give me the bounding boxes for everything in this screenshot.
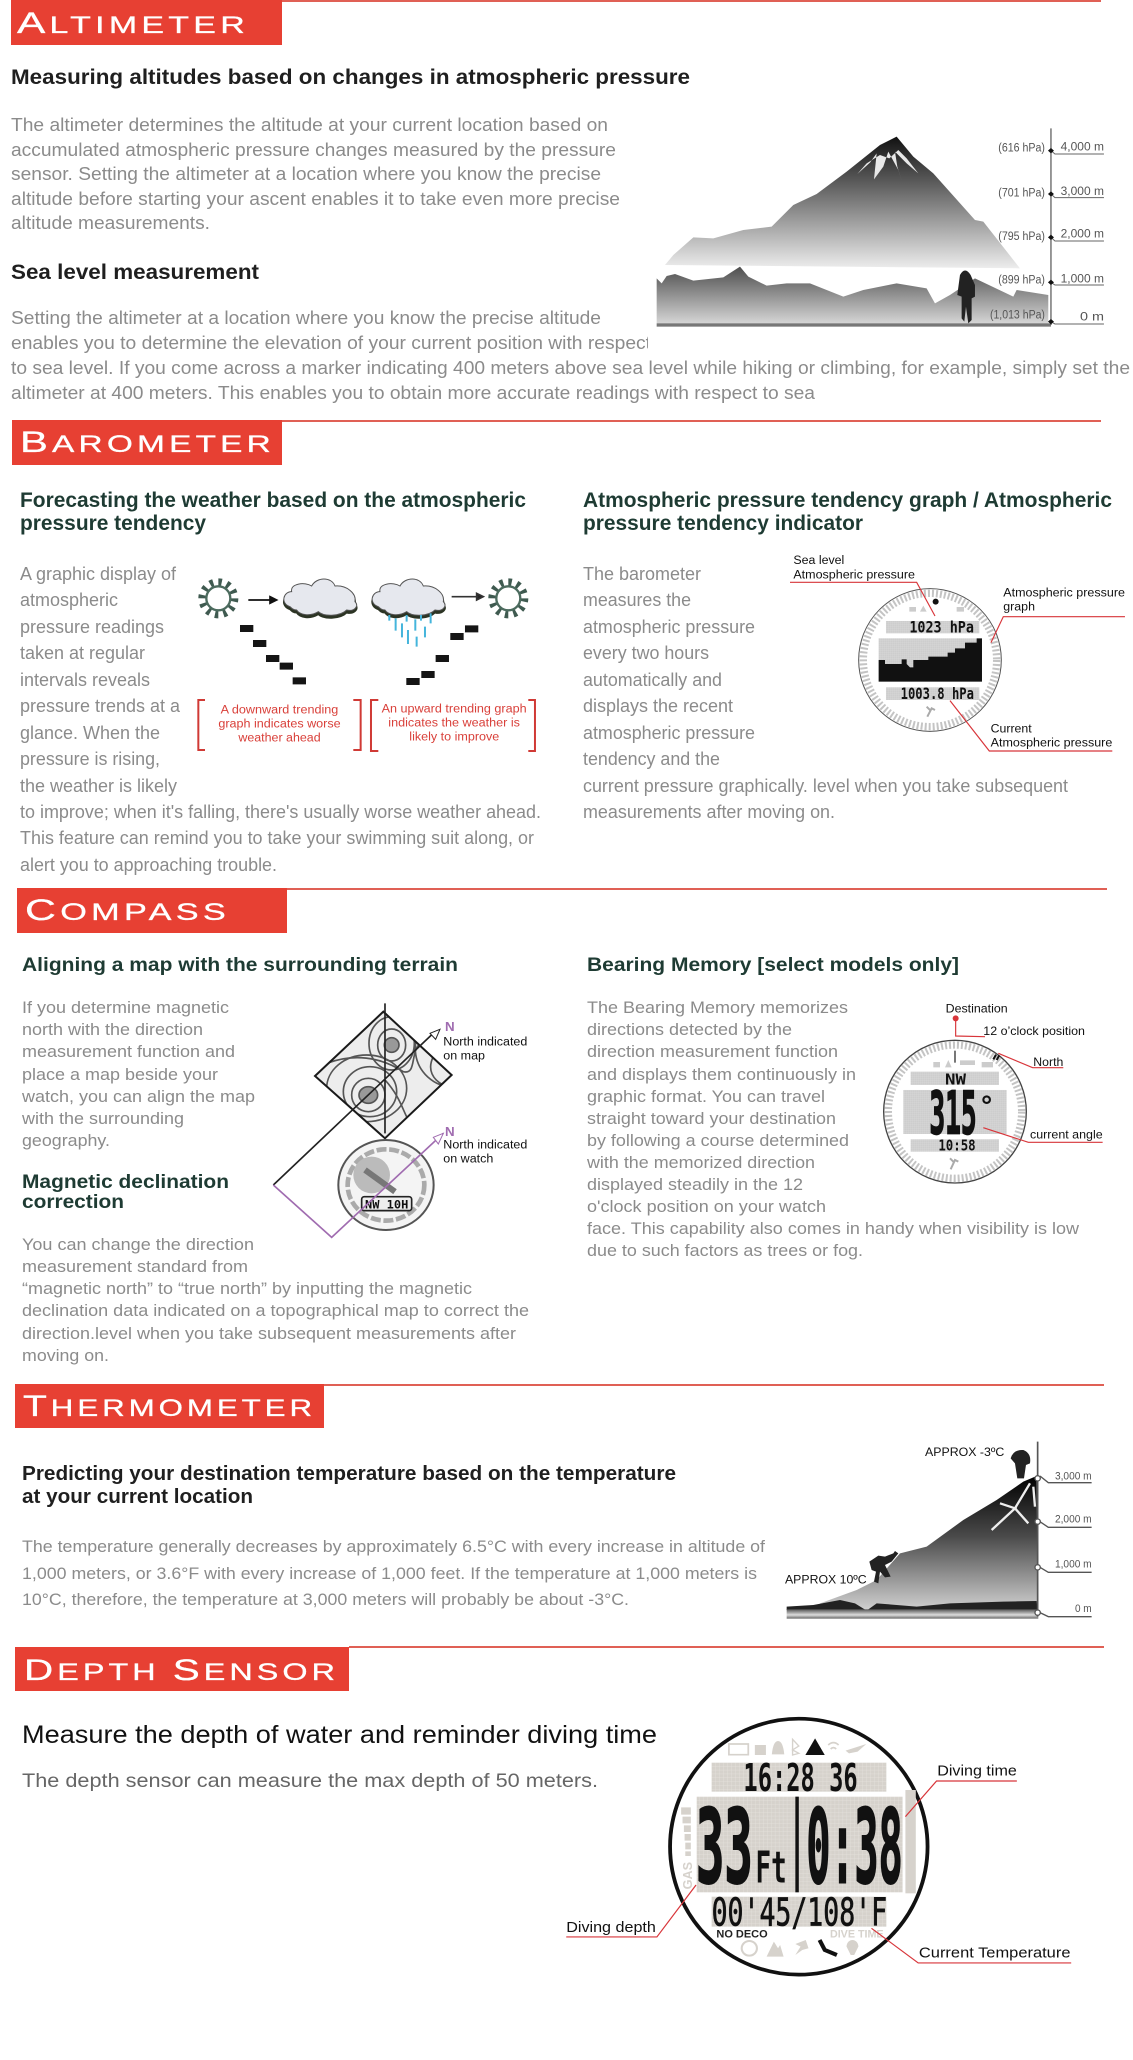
text block: tendency graph: displays the recent — [583, 696, 733, 716]
text block: altimeter description: The altimeter determines the altitude at your current location based on — [11, 115, 608, 135]
mountain slope — [817, 1476, 1038, 1610]
climber: lower — [869, 1551, 898, 1583]
text block: altimeter description — [11, 115, 620, 233]
label: current pressure: Current — [991, 722, 1032, 736]
panel: direction — [911, 1072, 999, 1085]
chart: pressure graph — [879, 638, 982, 682]
text block: forecasting: to improve; when it's falling, there's usually worse weather ahead. — [20, 802, 541, 822]
text block: temperature description: 1,000 meters, or 3.6°F with every increase of 1,000 feet. If the temperature at 1,000 meters is — [22, 1564, 757, 1583]
divider bar — [795, 1797, 799, 1892]
title: barometer: B AROMETER — [20, 426, 275, 459]
caption: downward: A downward trending — [221, 702, 338, 716]
section rule — [282, 420, 1101, 422]
text block: tendency graph: The barometer — [583, 564, 701, 584]
heading: aligning a map: Aligning a map with the surrounding terrain — [22, 954, 458, 976]
snow cap — [857, 150, 918, 183]
climber: summit — [1011, 1450, 1030, 1478]
map north line — [273, 1003, 435, 1185]
heading: predicting temperature — [22, 1463, 676, 1508]
marker: 12 o'clock tick — [953, 1051, 957, 1063]
icon: cloud — [284, 579, 357, 618]
section tab: barometer — [12, 420, 282, 465]
watch ring — [859, 589, 1001, 731]
text block: forecasting: pressure readings — [20, 617, 164, 637]
title: compass: C OMPASS — [25, 894, 230, 927]
text block: tendency graph: atmospheric pressure — [583, 617, 755, 637]
icon: sun left — [202, 582, 234, 614]
text block: forecasting: the weather is likely — [20, 776, 177, 796]
diagram: dive watch face: 0:38 — [806, 1787, 903, 1907]
text block: forecasting: This feature can remind you to take your swimming suit along, or — [20, 828, 534, 848]
reading: current pressure: 1003.8 hPa — [901, 684, 974, 703]
caption: downward: weather ahead — [237, 731, 321, 745]
text block: depth description: The depth sensor can measure the max depth of 50 meters. — [22, 1770, 598, 1792]
heading: predicting temperature: at your current location — [22, 1486, 253, 1508]
scale labels: (899 hPa) — [998, 272, 1045, 286]
heading: forecasting the weather: Forecasting the weather based on the atmospheric — [20, 489, 526, 512]
text block: sea level description — [11, 308, 1130, 403]
text block: magnetic declination: moving on. — [22, 1346, 109, 1365]
text block: bearing memory: straight toward your destination — [587, 1109, 836, 1128]
caption: upward: likely to improve — [409, 730, 500, 744]
mountain — [665, 137, 1020, 268]
panel: main readout — [697, 1797, 903, 1892]
scale ticks — [1051, 151, 1104, 324]
label: approx 10: APPROX 10ºC — [785, 1573, 867, 1586]
marker: destination — [953, 1015, 959, 1021]
text block: aligning a map: with the surrounding — [21, 1109, 184, 1128]
panel: compass — [17, 888, 1107, 1365]
text block: temperature description: 10°C, therefore, the temperature at 3,000 meters will probably be about -3°C. — [22, 1590, 629, 1609]
text block: bearing memory: o'clock position on your watch — [587, 1197, 826, 1216]
heading: bearing memory: Bearing Memory [select models only] — [587, 954, 959, 976]
label: diving time: Diving time — [937, 1763, 1017, 1780]
text block: tendency graph: every two hours — [583, 643, 709, 663]
text block: altimeter description: accumulated atmospheric pressure changes measured by the pressure — [11, 140, 616, 160]
text block: magnetic declination: “magnetic north” to “true north” by inputting the magnetic — [22, 1279, 473, 1298]
text block: sea level description: enables you to determine the elevation of your current position with respect — [11, 333, 651, 353]
scale markers — [1048, 148, 1054, 324]
text block: bearing memory: due to such factors as trees or fog. — [587, 1241, 863, 1260]
watch outline — [670, 1719, 928, 1975]
scale labels — [1055, 1470, 1092, 1615]
arrow: north on map — [430, 1029, 440, 1039]
label: no deco: NO DECO — [716, 1928, 768, 1940]
marker: north — [993, 1055, 999, 1060]
reading: clock: 16:28 36 — [743, 1756, 858, 1801]
scale ticks — [1040, 1476, 1092, 1617]
label: north on map — [443, 1019, 527, 1062]
brackets — [198, 700, 535, 751]
text block: magnetic declination — [22, 1235, 529, 1365]
arrow: sun to cloud — [248, 597, 277, 603]
caption: downward — [218, 702, 341, 745]
panel: current reading — [886, 687, 979, 700]
caption: upward — [382, 701, 527, 744]
text block: temperature description — [22, 1537, 765, 1609]
scale labels — [990, 140, 1104, 324]
gauge: gas — [681, 1807, 691, 1856]
heading line two: pressure tendency indicator — [583, 512, 863, 535]
scale labels: 0 m — [1075, 1603, 1092, 1615]
section tab: altimeter — [11, 0, 282, 45]
scale labels: 2,000 m — [1061, 226, 1104, 240]
text block: bearing memory: directions detected by the — [587, 1020, 792, 1039]
section tab: thermometer — [15, 1384, 324, 1428]
icon: rain — [389, 613, 431, 647]
panel: time — [911, 1139, 999, 1152]
caption: upward: An upward trending graph — [382, 701, 527, 715]
text block: forecasting: A graphic display of — [20, 564, 177, 584]
text block: magnetic declination: declination data indicated on a topographical map to correct the — [22, 1301, 529, 1320]
caption: upward: indicates the weather is — [388, 716, 520, 730]
diagram: bearing memory watch — [884, 1003, 1103, 1183]
label: diving depth: Diving depth — [566, 1919, 656, 1936]
watch: compass — [338, 1140, 434, 1230]
label: current pressure — [991, 722, 1113, 750]
text block: altimeter description: altitude before starting your ascent enables it to take even more precise — [11, 189, 620, 209]
icon: status row — [909, 606, 964, 612]
heading: magnetic declination correction — [22, 1171, 229, 1213]
section rule — [324, 1384, 1104, 1386]
reading: time and temperature: 00'45/108'F — [712, 1891, 887, 1935]
section tab: compass — [17, 888, 287, 933]
ground — [787, 1609, 1038, 1619]
scale labels: 1,000 m — [1061, 272, 1104, 286]
text block: forecasting: alert you to approaching trouble. — [20, 855, 277, 875]
scale labels: (701 hPa) — [998, 186, 1045, 200]
text block: forecasting — [20, 564, 541, 875]
text block: sea level description: Setting the altimeter at a location where you know the precise altitude — [11, 308, 601, 328]
watch ring — [884, 1040, 1026, 1183]
label: 12 o'clock position: 12 o’clock position — [983, 1025, 1085, 1038]
chart: temperature by altitude — [785, 1442, 1092, 1619]
label: north on watch: North indicated — [443, 1137, 527, 1151]
icon: rain cloud — [372, 579, 445, 618]
section rule — [349, 1646, 1104, 1648]
heading: pressure tendency graph: Atmospheric pressure tendency graph / Atmospheric — [583, 489, 1112, 512]
text block: altimeter description: altitude measurements. — [11, 213, 210, 233]
watch: compass: NW 10H — [365, 1197, 409, 1211]
text block: tendency graph: tendency and the — [583, 749, 720, 769]
icon: sun — [933, 599, 939, 605]
text block: aligning a map: watch, you can align the map — [21, 1087, 255, 1106]
label: north: North — [1033, 1056, 1063, 1069]
text block: temperature description: The temperature generally decreases by approximately 6.5°C with every increase in altitude of — [22, 1537, 765, 1556]
label: current pressure: Atmospheric pressure — [991, 736, 1113, 750]
text block: forecasting: intervals reveals — [20, 670, 150, 690]
scale labels: 0 m — [1080, 310, 1104, 324]
heading: measure depth: Measure the depth of water and reminder diving time — [22, 1721, 657, 1749]
label: dive time: DIVE TIME — [830, 1928, 884, 1940]
arrow: north on watch — [433, 1133, 443, 1144]
text block: aligning a map: north with the direction — [22, 1020, 203, 1039]
label: north on watch — [443, 1124, 527, 1165]
icon: mode row — [742, 1940, 858, 1957]
text block: aligning a map: measurement function and — [22, 1042, 235, 1061]
scale labels: 1,000 m — [1055, 1558, 1092, 1570]
diagram: bearing memory watch: 315 — [929, 1079, 977, 1147]
reading: degree sign: ° — [979, 1091, 995, 1122]
text block: forecasting: pressure is rising, — [20, 749, 160, 769]
text block: aligning a map: If you determine magnetic — [22, 998, 230, 1017]
scale labels: (616 hPa) — [998, 141, 1045, 155]
text block: magnetic declination: You can change the direction — [22, 1235, 254, 1254]
text block: tendency graph: automatically and — [583, 670, 722, 690]
hiker — [957, 270, 975, 323]
panel: angle — [903, 1090, 1007, 1134]
ground — [657, 323, 1051, 327]
bearing lines: purple — [273, 1133, 443, 1237]
reading: time: 10:58 — [938, 1138, 976, 1155]
text block: tendency graph — [583, 564, 1068, 822]
panel: thermometer — [15, 1384, 1104, 1619]
icon: runner — [950, 1158, 958, 1169]
text block: bearing memory: face. This capability also comes in handy when visibility is low — [587, 1219, 1080, 1238]
label: north on map: N — [445, 1019, 455, 1034]
text block: bearing memory: direction measurement function — [587, 1042, 838, 1061]
label: current angle: current angle — [1030, 1128, 1103, 1141]
label: north on watch: N — [445, 1124, 455, 1139]
leader lines — [956, 1018, 1103, 1142]
icon: status row — [933, 1060, 993, 1067]
section rule — [282, 0, 1101, 2]
text block: aligning a map: place a map beside your — [22, 1065, 218, 1084]
map: contour diamond — [315, 1012, 452, 1138]
reading: direction: NW — [945, 1070, 967, 1088]
scale labels: 2,000 m — [1055, 1514, 1092, 1526]
reading: sea level pressure: 1023 hPa — [909, 617, 974, 636]
text block: bearing memory: graphic format. You can travel — [587, 1087, 825, 1106]
label: north on map: North indicated — [443, 1035, 527, 1049]
text block: magnetic declination: measurement standard from — [22, 1257, 248, 1276]
reading: depth unit: Ft — [756, 1843, 787, 1893]
heading line two: pressure tendency — [20, 512, 206, 535]
text block: magnetic declination: direction.level when you take subsequent measurements after — [22, 1324, 516, 1343]
title: thermometer: T HERMOMETER — [23, 1390, 316, 1423]
label: sea level pressure: Atmospheric pressure — [793, 567, 915, 581]
label: pressure graph: Atmospheric pressure — [1003, 586, 1125, 600]
icon: status row — [729, 1739, 866, 1755]
text block: bearing memory: and displays them continuously in — [587, 1065, 856, 1084]
altitude axis — [1049, 128, 1053, 325]
text block: tendency graph: measures the — [583, 590, 691, 610]
caption: downward: graph indicates worse — [218, 716, 341, 730]
icon: diver — [820, 1940, 837, 1955]
text block: tendency graph: atmospheric pressure — [583, 723, 755, 743]
snow lines — [992, 1483, 1035, 1530]
foreground ridge — [657, 267, 1048, 323]
section tab: depth sensor — [15, 1647, 349, 1691]
label: gas: GAS — [680, 1861, 695, 1889]
text block: bearing memory: by following a course determined — [587, 1131, 849, 1150]
icon: warning triangle — [805, 1738, 825, 1755]
text block: aligning a map: geography. — [22, 1131, 110, 1150]
side strip — [905, 1790, 916, 1893]
title: altimeter: A LTIMETER — [17, 7, 249, 40]
panel: barometer — [12, 420, 1125, 875]
label: destination: Destination — [946, 1003, 1008, 1016]
panel: depth sensor — [15, 1646, 1104, 1975]
scale labels: 3,000 m — [1061, 184, 1104, 198]
altitude axis — [1035, 1442, 1040, 1617]
text block: bearing memory — [586, 998, 1080, 1260]
heading: magnetic declination correction: correction — [22, 1191, 124, 1213]
label: north on watch: on watch — [443, 1151, 493, 1165]
label: sea level pressure: Sea level — [793, 553, 844, 567]
arrow: cloud to sun — [452, 593, 483, 600]
scale labels: 3,000 m — [1055, 1470, 1092, 1482]
icon: runner — [927, 707, 935, 717]
text block: tendency graph: current pressure graphically. level when you take subsequent — [583, 776, 1068, 796]
text block: aligning a map — [21, 998, 255, 1150]
icon: sun right — [492, 582, 524, 614]
label: approx -3: APPROX -3ºC — [925, 1446, 1004, 1459]
panel: altimeter — [11, 0, 1130, 403]
panel: clock — [712, 1763, 886, 1792]
trend bars: downward — [240, 625, 306, 684]
panel: bottom readout — [712, 1897, 886, 1927]
text block: tendency graph: measurements after moving on. — [583, 802, 835, 822]
diagram: map and watch alignment — [273, 1003, 527, 1237]
label: current temperature: Current Temperature — [919, 1945, 1070, 1961]
heading: magnetic declination correction: Magnetic declination — [22, 1171, 229, 1193]
heading: sea level measurement: Sea level measurement — [11, 261, 259, 284]
trend bars: upward — [406, 625, 478, 685]
text block: forecasting: glance. When the — [20, 723, 160, 743]
heading: measuring altitudes: Measuring altitudes based on changes in atmospheric pressure — [11, 66, 690, 89]
label: pressure graph — [1003, 586, 1125, 614]
foreground ridge — [787, 1600, 1038, 1611]
text block: bearing memory: The Bearing Memory memorizes — [587, 998, 848, 1017]
scale labels: (795 hPa) — [998, 229, 1045, 243]
diagram: dive watch face — [566, 1719, 1071, 1975]
leader lines — [790, 582, 1125, 751]
scale labels: 4,000 m — [1061, 140, 1104, 154]
label: pressure graph: graph — [1003, 600, 1035, 614]
text block: altimeter description: sensor. Setting the altimeter at a location where you know the precise — [11, 164, 601, 184]
label: sea level pressure — [793, 553, 915, 581]
scale labels: (1,013 hPa) — [990, 307, 1045, 321]
text block: forecasting: atmospheric — [20, 590, 118, 610]
label: north on map: on map — [443, 1048, 485, 1062]
text block: bearing memory: displayed steadily in the 12 — [587, 1175, 803, 1194]
chart: mountain altitude and pressure scale — [657, 128, 1104, 327]
title: depth sensor: D EPTH S ENSOR — [24, 1654, 339, 1687]
diagram: dive watch face: 33 — [696, 1787, 753, 1907]
scale markers — [1035, 1476, 1040, 1615]
text block: bearing memory: with the memorized direction — [586, 1153, 815, 1172]
diagram: weather trend — [198, 579, 535, 751]
text block: forecasting: pressure trends at a — [20, 696, 181, 716]
text block: forecasting: taken at regular — [20, 643, 145, 663]
diagram: barometer watch face — [790, 553, 1125, 751]
panel: sea level reading — [886, 621, 979, 633]
text block: sea level description: altimeter at 400 meters. This enables you to obtain more accurate readings with respect to sea — [11, 383, 816, 403]
section rule — [287, 888, 1107, 890]
text block: sea level description: to sea level. If you come across a marker indicating 400 meters above sea level while hiking or climbing, for example, simply set the — [11, 358, 1130, 378]
heading: predicting temperature: Predicting your destination temperature based on the temperature — [22, 1463, 676, 1485]
leader lines — [566, 1781, 1071, 1963]
